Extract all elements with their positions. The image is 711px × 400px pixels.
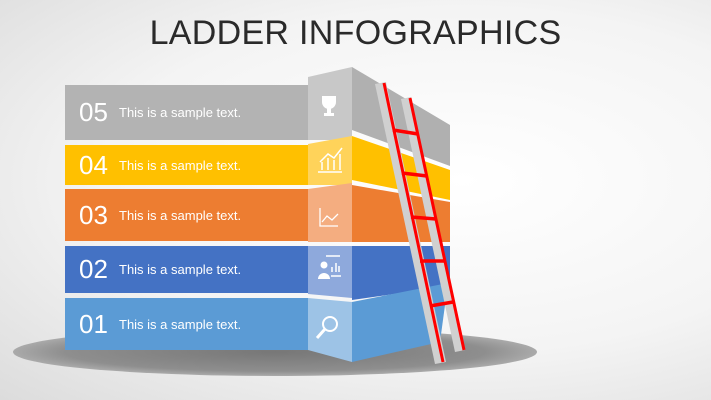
row 02 (65, 246, 308, 293)
block 3 orange (308, 183, 450, 242)
row 01 (65, 298, 308, 350)
row 03: This is a sample text. (119, 208, 241, 222)
block 2 blue (308, 246, 450, 300)
row 02: This is a sample text. (119, 262, 241, 277)
row 03 (65, 189, 308, 241)
row 04 (65, 145, 308, 185)
row 03: 03 (79, 200, 108, 230)
icon: line chart (320, 208, 338, 226)
block 1 light blue (308, 283, 448, 362)
row 04: This is a sample text. (119, 158, 241, 172)
row 05 (65, 85, 308, 140)
row 04: 04 (79, 150, 108, 180)
row 01: 01 (79, 308, 108, 338)
icon: trophy (322, 96, 336, 116)
icon: magnifier (317, 317, 337, 338)
ladder (375, 82, 465, 364)
block 5 gray (308, 67, 450, 166)
shadow (13, 328, 537, 376)
row 05: 05 (79, 97, 108, 127)
icon: presenter (318, 256, 341, 279)
icon: growth chart (318, 148, 342, 172)
block 4 yellow (308, 136, 450, 200)
icons (317, 96, 342, 338)
row 01: This is a sample text. (119, 316, 241, 332)
row 05: This is a sample text. (119, 105, 241, 120)
title: LADDER INFOGRAPHICS (150, 14, 561, 52)
row 02: 02 (79, 254, 108, 284)
